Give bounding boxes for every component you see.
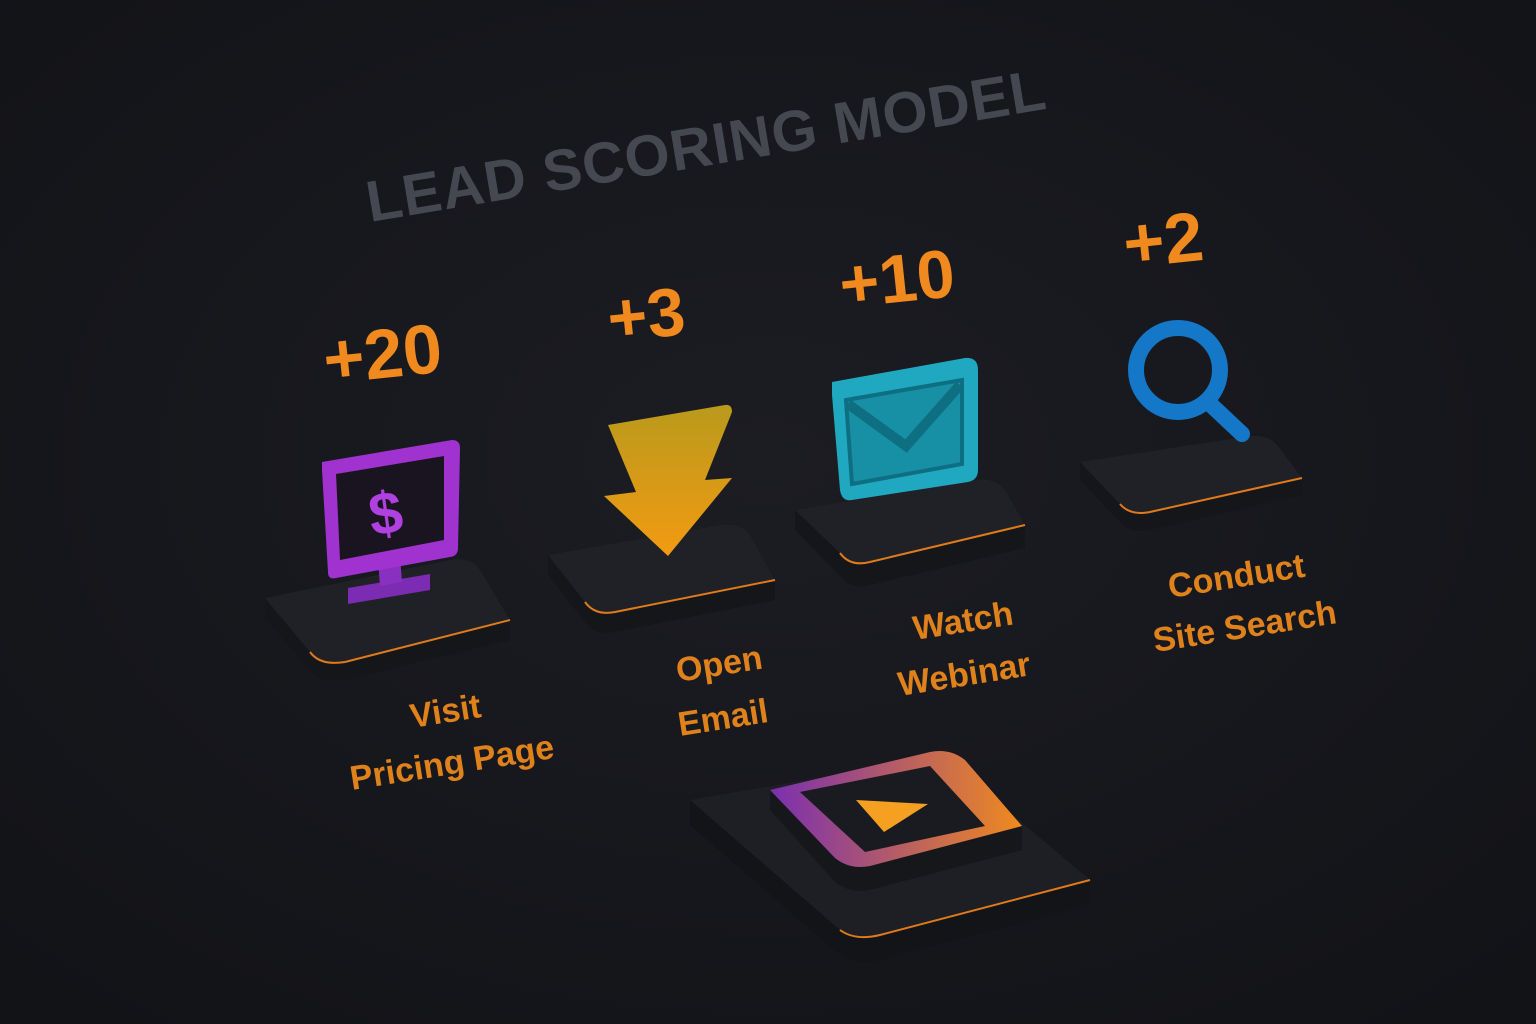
label visit pricing page: Visit [407,687,484,736]
card: visit pricing page: Pricing Page [347,728,557,798]
play button platform [690,751,1090,962]
label watch webinar: Watch [910,595,1016,648]
card: watch webinar [795,235,1033,704]
platform 2 [548,524,775,633]
score +3: +3 [604,273,689,357]
label site search: Conduct [1165,547,1307,606]
platform 3 [795,479,1025,586]
icon: monitor dollar [322,440,460,604]
card: open email [548,273,775,744]
icon: magnifier [1136,328,1242,434]
icon: play button [770,751,1022,867]
icon: monitor dollar: $ [364,478,407,549]
card: site search [1080,197,1339,660]
card: open email: Email [675,692,771,744]
title: LEAD SCORING MODEL [361,57,1051,235]
platform 1 [265,559,510,681]
icon: envelope [832,358,978,500]
card: visit pricing page [265,309,557,798]
platform 4 [1080,436,1302,531]
icon: down arrow [604,405,732,556]
score +2: +2 [1119,197,1207,283]
card: site search: Site Search [1150,593,1339,660]
score +20: +20 [319,309,446,399]
score +10: +10 [836,235,958,323]
card: watch webinar: Webinar [895,645,1033,704]
label open email: Open [673,639,765,690]
